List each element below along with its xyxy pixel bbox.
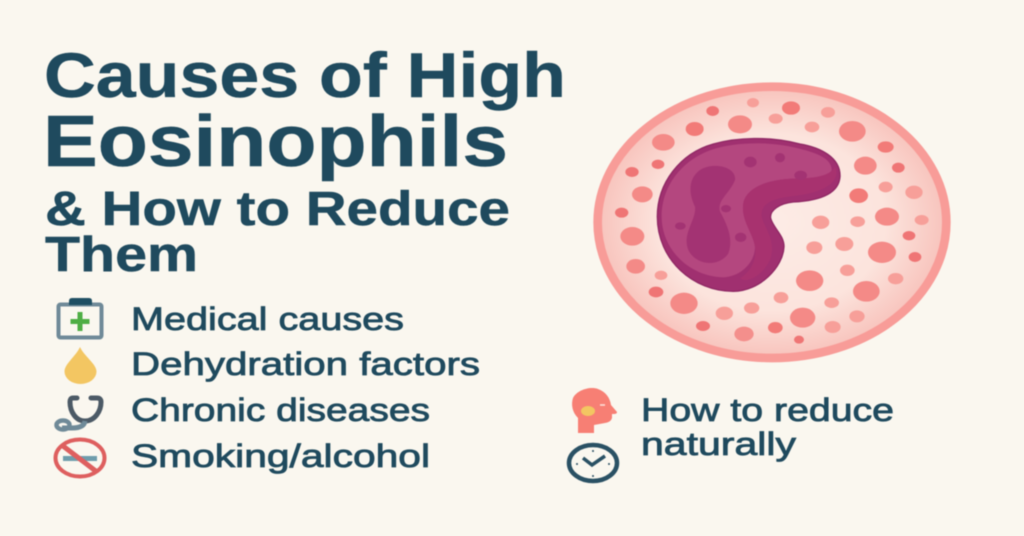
icon: no smoking bbox=[56, 440, 104, 476]
cell body bbox=[598, 87, 946, 358]
eosinophil cell bbox=[598, 87, 946, 358]
nucleus bbox=[657, 138, 840, 291]
label: medical causes: Medical causes bbox=[131, 301, 404, 337]
label: dehydration factors: Dehydration factors bbox=[131, 346, 480, 382]
icon: head bbox=[572, 388, 617, 433]
title: Them bbox=[45, 228, 198, 282]
granules bbox=[615, 98, 929, 344]
label: smoking and alcohol: Smoking/alcohol bbox=[131, 438, 430, 474]
icon: medical kit bbox=[58, 298, 102, 338]
icon: clock bbox=[569, 445, 617, 481]
label: how to reduce naturally bbox=[641, 392, 894, 462]
label: how to reduce naturally: naturally bbox=[641, 426, 797, 462]
icon: water drop bbox=[64, 347, 96, 384]
title: & How to Reduce bbox=[45, 182, 510, 236]
title: Eosinophils bbox=[43, 102, 508, 182]
icon: stethoscope bbox=[56, 398, 101, 430]
label: how to reduce naturally: How to reduce bbox=[641, 392, 894, 428]
title bbox=[43, 41, 566, 282]
title: Causes of High bbox=[44, 41, 566, 111]
label: chronic diseases: Chronic diseases bbox=[131, 392, 430, 428]
